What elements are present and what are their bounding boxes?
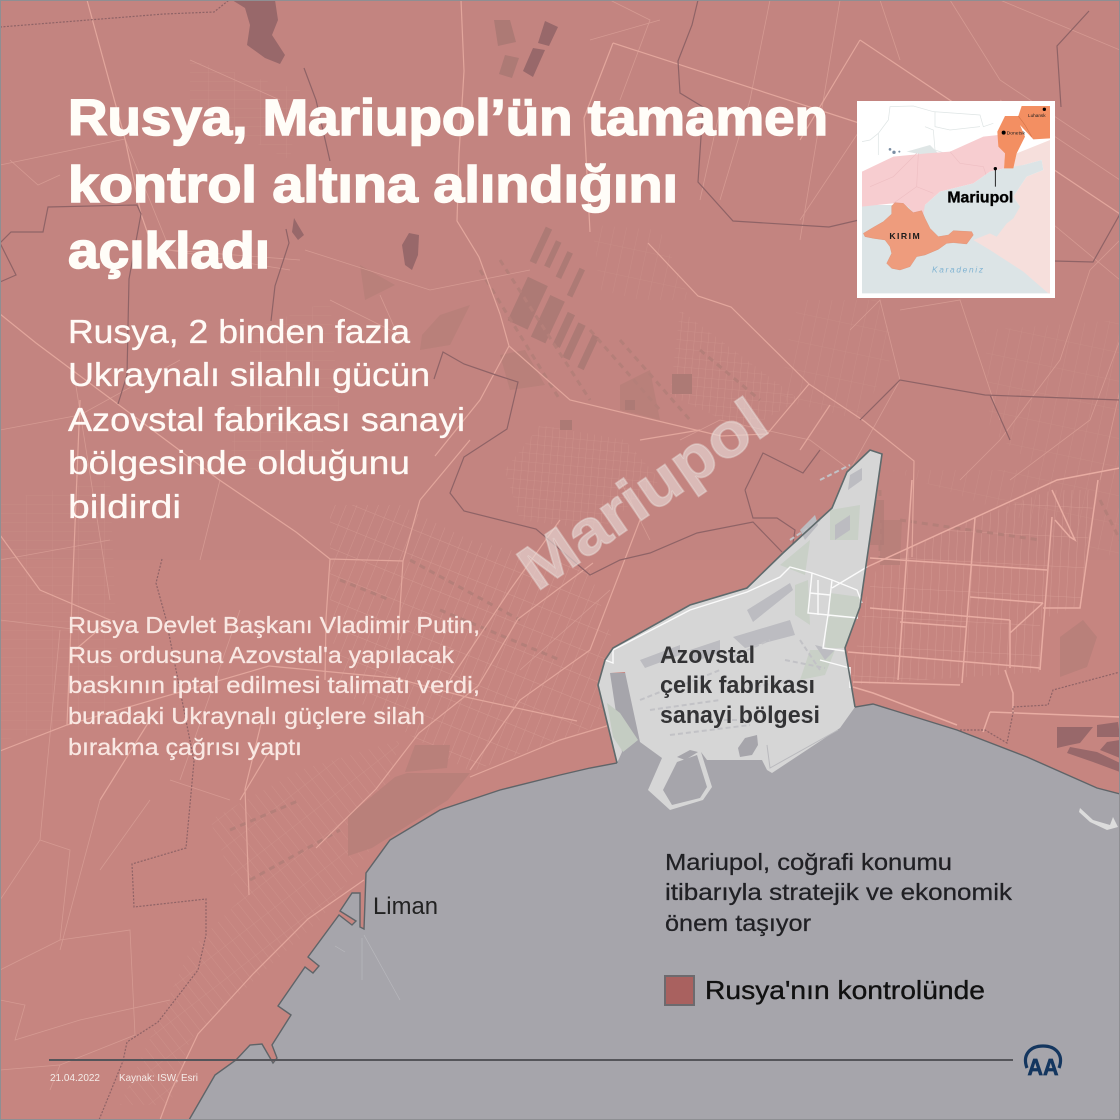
inset locator map: Luhansk — [1028, 113, 1046, 118]
subtitle: bölgesinde olduğunu — [68, 444, 410, 481]
subtitle: Ukraynalı silahlı gücün — [68, 356, 430, 393]
body text: buradaki Ukraynalı güçlere silah — [68, 703, 425, 729]
inset: Sea of Azov — [923, 160, 1043, 237]
inset locator map: Donetsk — [1007, 131, 1025, 137]
inset locator map — [857, 101, 1055, 298]
title: açıkladı — [68, 222, 270, 279]
harbour water behind the plant — [608, 673, 855, 775]
text: strategic note — [665, 849, 1013, 936]
inset: Donetsk-Luhansk — [997, 106, 1050, 168]
inset: Russian territory — [973, 140, 1050, 293]
panel: Azovstal industrial zone — [598, 450, 882, 810]
subtitle: Azovstal fabrikası sanayi — [68, 401, 465, 438]
inset: city markers — [1043, 108, 1046, 111]
subtitle: Rusya, 2 binden fazla — [68, 313, 411, 350]
title: Rusya, Mariupol’ün tamamen — [68, 89, 828, 146]
harbour breakwater marks — [335, 935, 400, 1000]
inset: occupied southern Ukraine — [862, 135, 1005, 215]
label: Azovstal plant: sanayi bölgesi — [660, 702, 820, 729]
footer source: 21.04.2022 — [50, 1072, 100, 1084]
text: strategic note: itibarıyla stratejik ve ekonomik — [665, 879, 1013, 905]
label: Azovstal plant: çelik fabrikası — [660, 672, 815, 699]
map: sea of Azov — [189, 704, 1120, 1120]
darker blocks and lakes — [348, 265, 1097, 856]
sandbar — [1079, 808, 1118, 830]
label: Mariupol map watermark: Mariupol — [506, 385, 780, 604]
text: strategic note: önem taşıyor — [665, 910, 811, 936]
text: strategic note: Mariupol, coğrafi konumu — [665, 849, 952, 875]
body text — [68, 612, 480, 760]
body text: baskının iptal edilmesi talimatı verdi, — [68, 672, 480, 698]
body text: bırakma çağrısı yaptı — [68, 734, 302, 760]
legend: Rusya'nın kontrolünde — [705, 975, 985, 1005]
inset locator map: KIRIM — [889, 231, 921, 241]
subtitle: bildirdi — [68, 488, 181, 525]
subtitle — [68, 313, 465, 525]
icon: AA logo: AA — [1028, 1054, 1058, 1080]
footer rule — [49, 1059, 1013, 1061]
label: Azovstal plant — [660, 642, 820, 729]
title: kontrol altına alındığını — [68, 156, 678, 213]
inset: Crimea — [863, 203, 973, 270]
inset: northern boundaries — [862, 106, 993, 155]
label: port: Liman — [373, 893, 438, 920]
title — [68, 89, 828, 279]
inset locator map: Karadeniz — [932, 265, 984, 275]
footer source — [50, 1072, 198, 1084]
footer source: Kaynak: ISW, Esri — [119, 1072, 198, 1084]
body text: Rus ordusuna Azovstal'a yapılacak — [68, 642, 455, 668]
inset: sea — [862, 205, 1050, 293]
body text: Rusya Devlet Başkanı Vladimir Putin, — [68, 612, 480, 638]
inset locator map: Mariupol — [947, 190, 1013, 207]
map boundary lines — [0, 0, 1120, 575]
label: Azovstal plant: Azovstal — [660, 642, 755, 669]
